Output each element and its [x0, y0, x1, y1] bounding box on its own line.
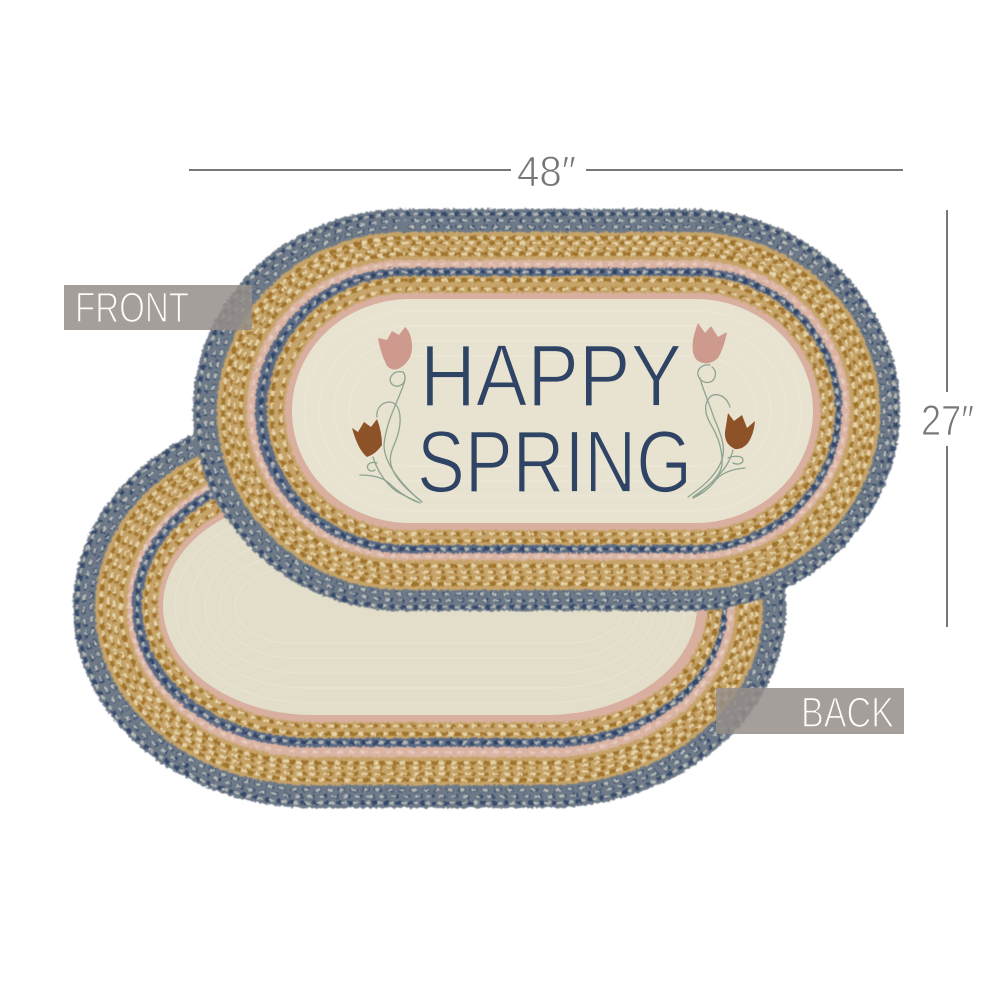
rug lettering: Happy Spring: SPRING: [417, 412, 692, 511]
back rug plain center: [163, 497, 697, 715]
dimension: width 48 inches: 48″: [517, 148, 576, 196]
panel: back of rug: [73, 407, 786, 808]
label: BACK: BACK: [801, 689, 894, 737]
rug lettering: Happy Spring: HAPPY: [420, 326, 682, 425]
label: BACK: [716, 688, 904, 737]
front rug braided bands: [193, 209, 900, 611]
rug lettering: Happy Spring: [417, 326, 692, 511]
back rug braided bands: [73, 407, 786, 808]
front rug cream center: [292, 299, 813, 523]
icon: left tulips: [352, 327, 422, 503]
label: FRONT: FRONT: [75, 284, 189, 332]
dimension: height 27 inches: 27″: [921, 397, 974, 445]
panel: front of rug: [193, 209, 900, 611]
icon: right tulips: [688, 323, 755, 498]
